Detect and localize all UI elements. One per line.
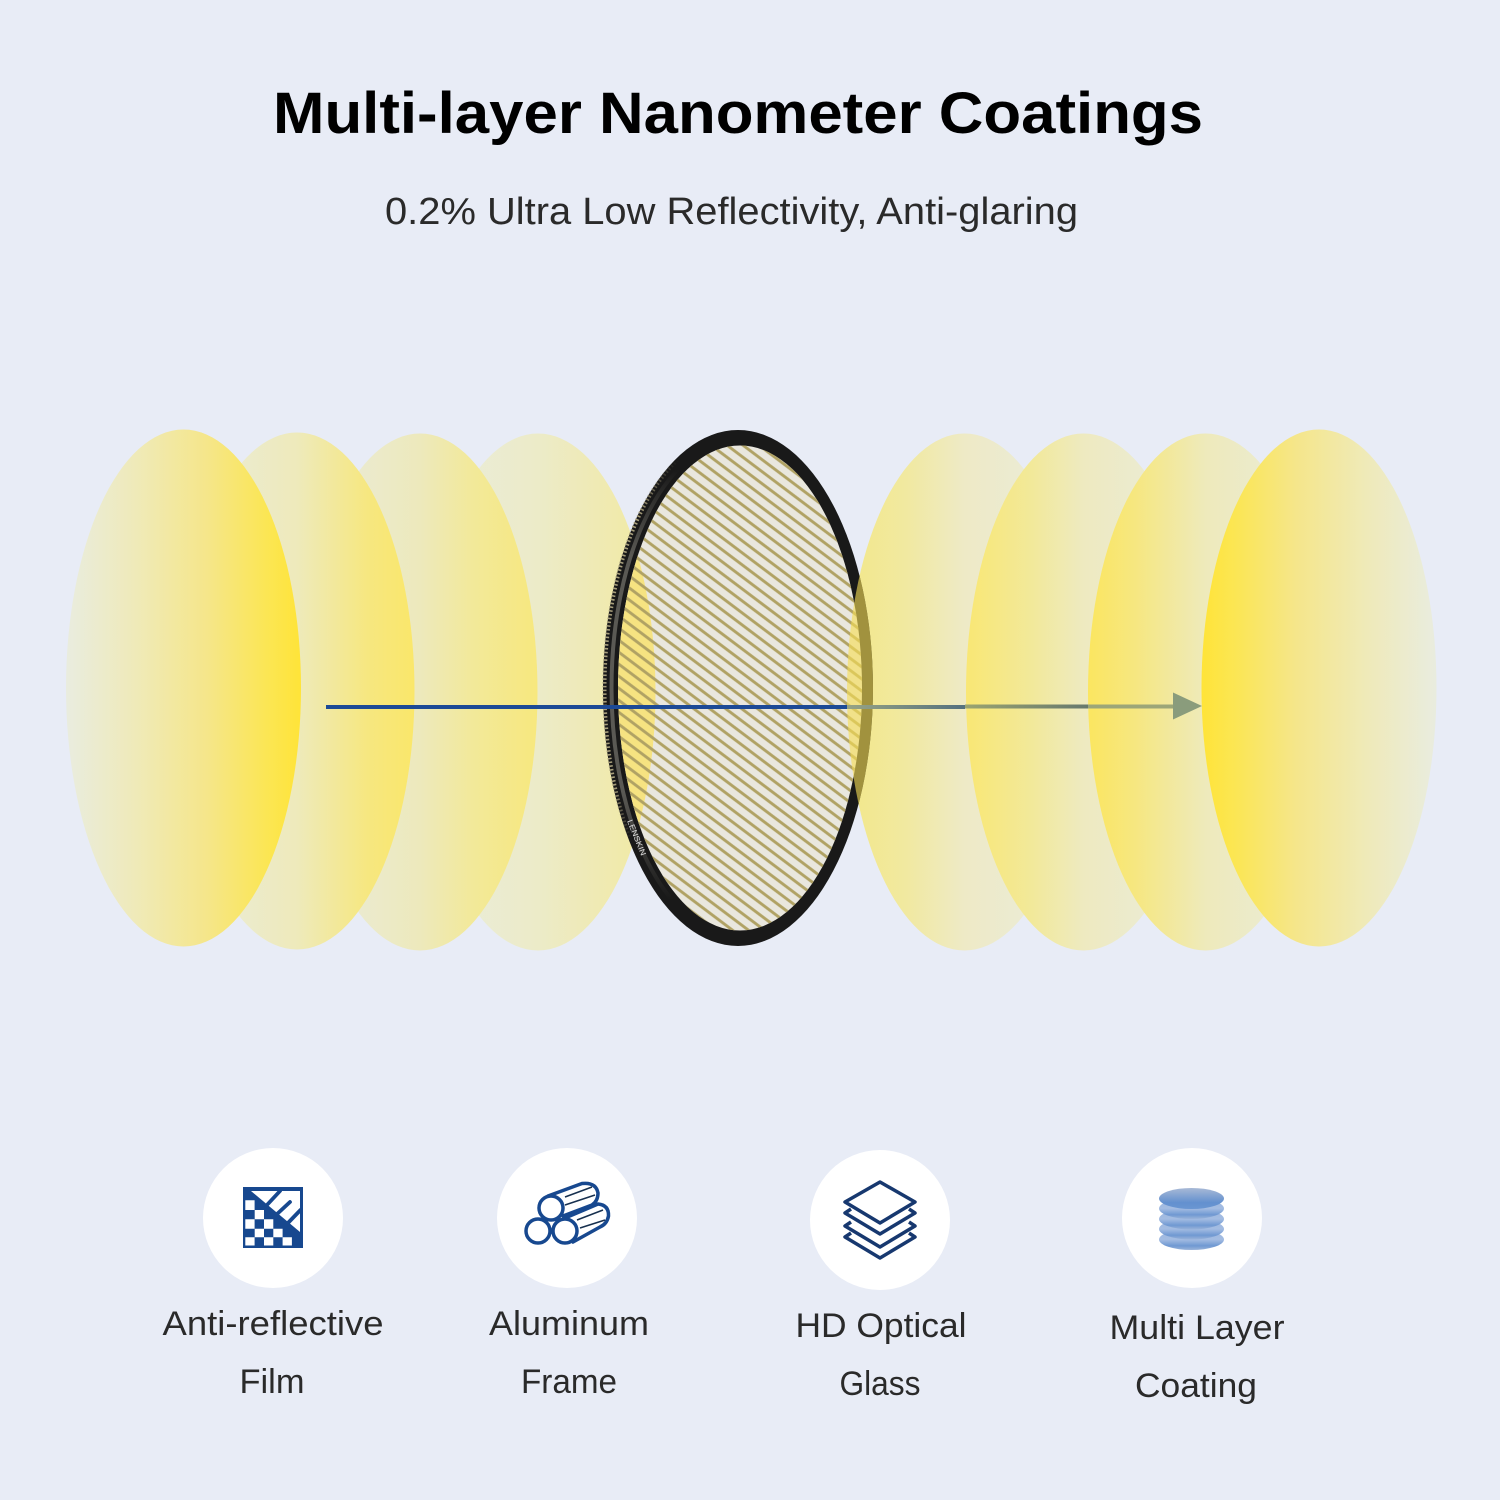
- icon: aluminum tubes: [497, 1148, 637, 1288]
- brand mark on filter rim: LENSKIN: [625, 818, 648, 857]
- subtitle: 0.2% Ultra Low Reflectivity, Anti-glaring: [385, 191, 1078, 233]
- title: Multi-layer Nanometer Coatings: [273, 81, 1203, 146]
- label line 2: Coating: [1135, 1367, 1257, 1405]
- lens filter: [602, 430, 873, 946]
- label: Aluminum: [489, 1305, 649, 1343]
- label line 2: Film: [240, 1363, 304, 1401]
- icon: coating stack: [1122, 1148, 1262, 1288]
- icon: glass layers: [810, 1150, 950, 1290]
- feature: multi layer coating: [1110, 1148, 1284, 1405]
- label: Multi Layer: [1110, 1309, 1284, 1347]
- label: Anti-reflective: [162, 1305, 384, 1343]
- feature: HD optical glass: [796, 1150, 966, 1403]
- feature: anti-reflective film: [162, 1148, 384, 1401]
- label: HD Optical: [796, 1307, 966, 1345]
- light arrow: [326, 692, 1202, 720]
- label line 2: Frame: [521, 1363, 617, 1401]
- left light discs: [66, 430, 656, 950]
- label line 2: Glass: [840, 1365, 920, 1403]
- feature: aluminum frame: [489, 1148, 649, 1401]
- icon: anti-reflective film: [203, 1148, 343, 1288]
- diagram: light passing through the filter: [66, 430, 1436, 950]
- right light discs: [847, 430, 1436, 950]
- right disc overlap tinting the filter: [847, 576, 873, 804]
